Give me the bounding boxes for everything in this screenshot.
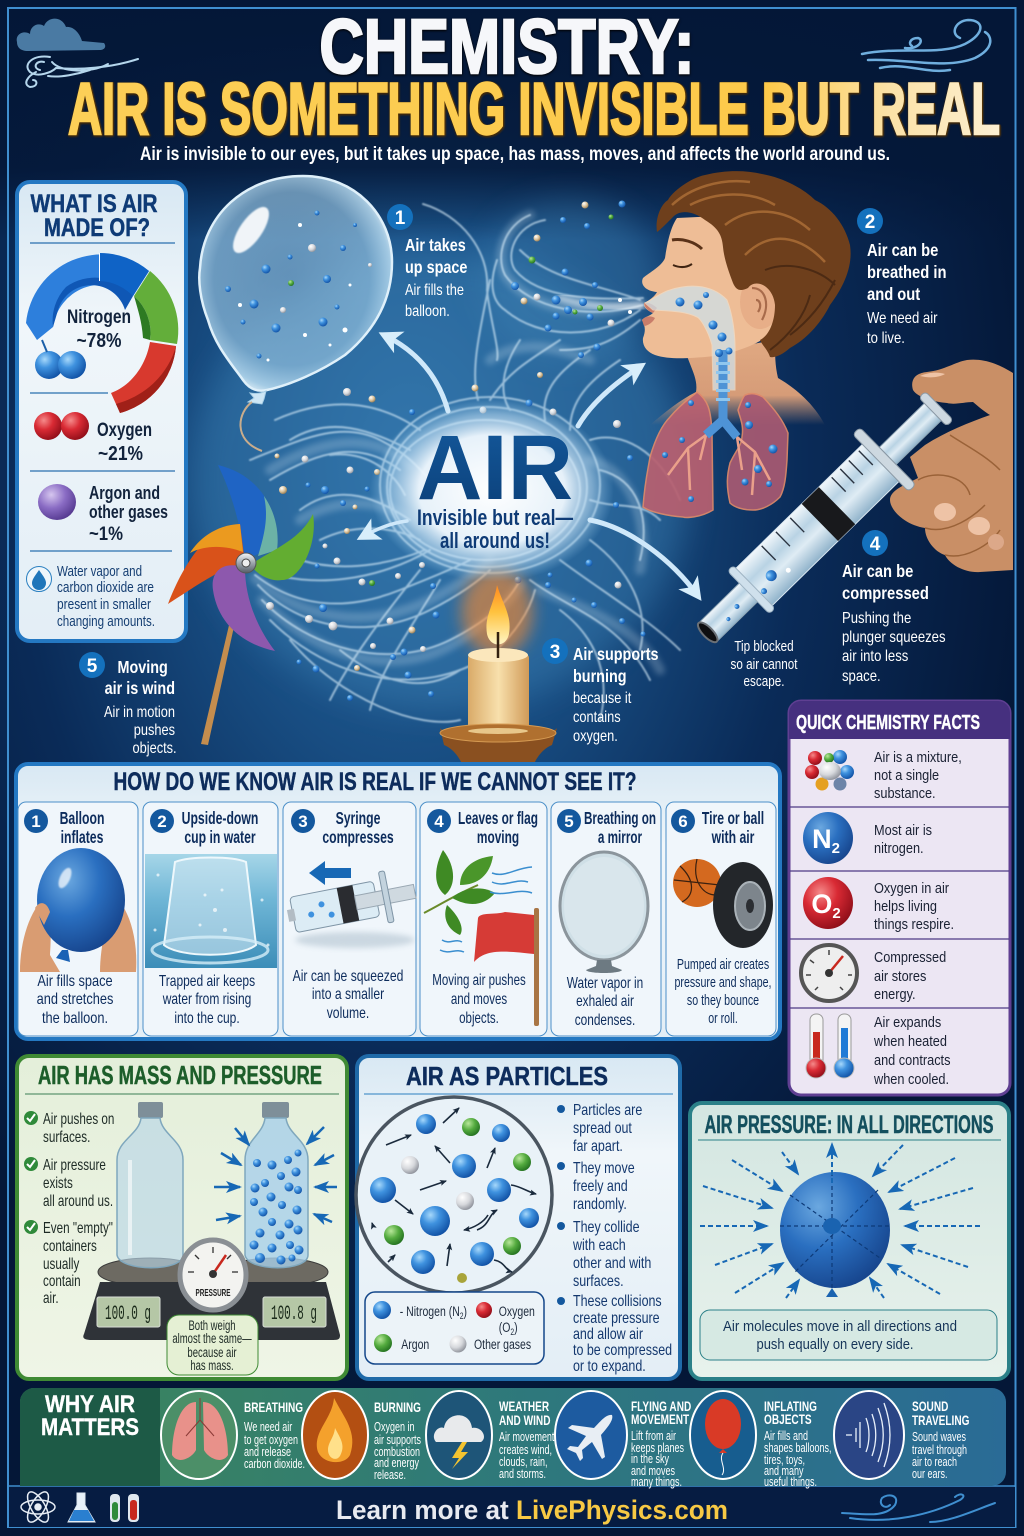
card 4: leaves and flag moving: Moving air pushes <box>432 970 526 988</box>
row text: mixture: not a single <box>874 766 939 783</box>
icon: flask <box>68 1493 95 1522</box>
caption box: Air molecules move in all directions and <box>723 1318 957 1335</box>
panel: air as particles <box>356 1056 680 1379</box>
item: flying and movement: many things. <box>631 1476 682 1489</box>
row text: expands: when heated <box>873 1032 947 1049</box>
item: sound traveling: travel through <box>912 1444 967 1457</box>
row text: oxygen: things respire. <box>874 915 954 932</box>
card 2: upside-down cup: cup in water <box>184 828 256 848</box>
decorative wind swirl bottom right <box>842 1494 995 1522</box>
item: weather and wind <box>426 1391 554 1481</box>
panel: air pressure in all directions <box>690 1103 1009 1379</box>
card 1: balloon inflates: inflates <box>61 828 103 848</box>
item: inflating objects: Air fills and <box>764 1430 808 1443</box>
item: sound traveling <box>834 1391 969 1481</box>
card 6: tire or ball: with air <box>711 828 754 848</box>
item: inflating objects: and many <box>764 1465 804 1478</box>
item: weather and wind: clouds, rain, <box>499 1456 547 1469</box>
checklist: usually <box>43 1254 79 1272</box>
particle legend: 2 <box>510 1327 515 1337</box>
card 5: breathing on a mirror <box>551 802 661 1036</box>
item: flying and movement: keeps planes <box>631 1442 684 1455</box>
water vapor note: present in smaller <box>57 597 151 613</box>
callout 5: moving air is wind: 5 <box>87 656 98 677</box>
callout 4: air can be compressed: 4 <box>870 534 881 555</box>
callout 1: air takes up space <box>387 204 467 320</box>
callout 4: air can be compressed: Pushing the <box>842 610 911 627</box>
caption box <box>700 1310 997 1360</box>
row text: compressed air: air stores <box>874 967 926 984</box>
card 1: balloon inflates: Air fills space <box>37 973 113 990</box>
item: sound traveling: TRAVELING <box>912 1412 969 1428</box>
item: sound traveling: SOUND <box>912 1398 949 1414</box>
item: sound traveling: Sound waves <box>912 1431 966 1444</box>
item: breathing: BREATHING <box>244 1399 303 1415</box>
row text: nitrogen: nitrogen. <box>874 839 924 856</box>
argon row <box>38 483 168 545</box>
pinwheel illustration <box>168 465 314 745</box>
callout 1: air takes up space: Air takes <box>405 236 466 255</box>
item: sound traveling: our ears. <box>912 1468 947 1481</box>
card 4: leaves and flag moving <box>420 802 547 1036</box>
callout 5: moving air is wind: Air in motion <box>104 704 175 721</box>
candle illustration <box>440 567 557 762</box>
item: breathing: and release <box>244 1446 291 1459</box>
item: flying and movement: in the sky <box>631 1453 669 1466</box>
particle bullets: with each <box>572 1237 626 1254</box>
particle legend: 2 <box>460 1311 464 1321</box>
checklist: air. <box>43 1288 59 1306</box>
panel: how do we know air is real <box>16 764 780 1039</box>
checklist: all around us. <box>43 1191 113 1209</box>
item: breathing: carbon dioxide. <box>244 1458 305 1471</box>
callout 2: air can be breathed: and out <box>867 285 921 304</box>
checklist <box>24 1109 114 1306</box>
item: flying and movement: and moves <box>631 1465 675 1478</box>
hand on plunger <box>890 360 1013 572</box>
particle bullets: spread out <box>573 1120 632 1137</box>
particle bullets: to be compressed <box>573 1342 672 1359</box>
oxygen row <box>34 412 152 465</box>
oxygen row: Oxygen <box>97 420 152 441</box>
callout 4: air can be compressed: Air can be <box>842 562 913 581</box>
particle bullets: and allow air <box>573 1326 643 1343</box>
card 6: tire or ball: pressure and shape, <box>674 973 772 990</box>
callout 4: air can be compressed <box>842 530 946 685</box>
card 6: tire or ball <box>666 802 776 1036</box>
particle bullets: These collisions <box>573 1293 662 1310</box>
panel: why air matters <box>20 1388 1006 1489</box>
checklist: containers <box>43 1236 97 1254</box>
callout 3: air supports burning: burning <box>573 667 627 686</box>
card 2: upside-down cup: water from rising <box>162 989 251 1007</box>
panel: what is air made of: MADE OF? <box>44 214 150 242</box>
central AIR label <box>362 335 698 596</box>
note: both weigh the same: because air <box>187 1344 237 1361</box>
card 3: syringe compresses: Air can be squeezed <box>293 967 403 986</box>
particle legend <box>365 1292 544 1364</box>
particle legend: - Nitrogen (N <box>400 1304 460 1319</box>
card 1: balloon inflates: and stretches <box>37 991 113 1008</box>
particle legend: (O <box>499 1320 510 1335</box>
particle bullets: surfaces. <box>573 1273 624 1290</box>
card 3: syringe compresses: 3 <box>298 812 308 831</box>
icon: test tubes <box>110 1494 139 1522</box>
item: inflating objects: INFLATING <box>764 1398 817 1414</box>
callout 4: air can be compressed: space. <box>842 668 881 685</box>
card 4: leaves and flag moving: objects. <box>459 1008 499 1026</box>
title <box>68 4 1000 150</box>
central AIR label: AIR <box>417 417 573 519</box>
item: burning: release. <box>374 1469 406 1482</box>
syringe tip note: Tip blocked <box>734 638 794 654</box>
particle bullets: randomly. <box>573 1196 627 1213</box>
pressure sphere diagram <box>700 1144 980 1298</box>
argon row: Argon and <box>89 483 160 503</box>
callout 1: air takes up space: up space <box>405 258 467 277</box>
callout 3: air supports burning: because it <box>573 690 631 707</box>
callout 1: air takes up space: balloon. <box>405 303 450 320</box>
item: burning <box>302 1391 421 1482</box>
item: breathing: We need air <box>244 1421 293 1434</box>
card 6: tire or ball: Pumped air creates <box>677 955 770 972</box>
card 1: balloon inflates: the balloon. <box>42 1010 108 1027</box>
particle bullets: Particles are <box>573 1102 642 1119</box>
callout 1: air takes up space: Air fills the <box>405 282 464 299</box>
particle circle diagram <box>356 1097 552 1293</box>
particle bullets: They collide <box>573 1219 640 1236</box>
scale base: 100.8 g <box>271 1303 317 1326</box>
callout 4: air can be compressed: air into less <box>842 648 908 665</box>
composition donut chart: ~78% <box>76 330 122 352</box>
icon: atom <box>21 1489 55 1525</box>
air swirl background <box>190 200 690 722</box>
particle bullets: They move <box>573 1160 635 1177</box>
checklist: Air pressure <box>43 1155 106 1173</box>
syringe tip note: escape. <box>744 673 784 689</box>
syringe tip note: so air cannot <box>731 656 798 672</box>
callout 2: air can be breathed: We need air <box>867 310 938 327</box>
icon: N2: N <box>812 824 832 854</box>
card 3: syringe compresses: compresses <box>322 828 394 848</box>
note: both weigh the same: almost the same— <box>172 1330 252 1347</box>
icon: N2 <box>803 812 853 864</box>
item: inflating objects: OBJECTS <box>764 1411 812 1427</box>
callout 1: air takes up space: 1 <box>395 208 406 229</box>
card 4: leaves and flag moving: Leaves or flag <box>458 809 538 829</box>
card 3: syringe compresses: volume. <box>327 1004 369 1023</box>
card 6: tire or ball: Tire or ball <box>702 809 764 829</box>
card 3: syringe compresses: Syringe <box>336 809 381 829</box>
row text: nitrogen: Most air is <box>874 821 932 838</box>
card 5: breathing on a mirror: condenses. <box>575 1010 635 1028</box>
central AIR label: all around us! <box>440 528 550 553</box>
particle bullets: freely and <box>573 1178 628 1195</box>
card 2: upside-down cup <box>143 802 278 1036</box>
card 5: breathing on a mirror: Water vapor in <box>567 973 643 991</box>
checklist: Even "empty" <box>43 1218 113 1236</box>
scale base <box>83 1258 340 1340</box>
callout 2: air can be breathed: breathed in <box>867 263 946 282</box>
panel: why air matters: MATTERS <box>41 1414 139 1441</box>
card 6: tire or ball: 6 <box>678 812 688 831</box>
note: both weigh the same: has mass. <box>190 1357 234 1374</box>
particle legend: ) <box>464 1304 467 1319</box>
item: flying and movement: FLYING AND <box>631 1398 691 1414</box>
callout 5: moving air is wind: pushes <box>134 722 175 739</box>
callout 3: air supports burning: contains <box>573 709 621 726</box>
water vapor note: carbon dioxide are <box>57 580 154 596</box>
callout 3: air supports burning: oxygen. <box>573 728 618 745</box>
particle bullets: or to expand. <box>573 1358 646 1375</box>
panel: what is air made of <box>17 182 186 641</box>
boy breathing illustration <box>642 171 851 517</box>
card 2: upside-down cup: Trapped air keeps <box>159 971 255 989</box>
callout 5: moving air is wind <box>79 652 177 757</box>
card 2: upside-down cup: 2 <box>157 812 167 831</box>
subtitle: Air is invisible to our eyes, but it takes up space, has mass, moves, and affects the world around us. <box>140 144 890 165</box>
row text: oxygen: helps living <box>874 897 937 914</box>
decorative wind swirl top right <box>862 20 990 71</box>
item: breathing <box>161 1391 305 1479</box>
heading: WHAT IS AIR <box>30 190 158 218</box>
heading: HOW DO WE KNOW AIR IS REAL IF WE CANNOT SEE IT? <box>114 768 636 796</box>
particle bullets: create pressure <box>573 1310 660 1327</box>
water vapor note: changing amounts. <box>57 614 155 630</box>
balloon illustration <box>199 176 392 451</box>
card 5: breathing on a mirror: a mirror <box>598 828 642 848</box>
arrows from center <box>362 335 698 596</box>
card 1: balloon inflates: 1 <box>31 812 41 831</box>
call to action: Learn more at LivePhysics.com <box>336 1495 728 1525</box>
callout 3: air supports burning: Air supports <box>573 645 659 664</box>
note: both weigh the same: Both weigh <box>188 1317 236 1334</box>
checklist: contain <box>43 1271 81 1289</box>
item: sound traveling: air to reach <box>912 1456 957 1469</box>
row text: expands: and contracts <box>874 1051 951 1068</box>
checklist: exists <box>43 1173 73 1191</box>
panel: quick chemistry facts <box>789 701 1010 1095</box>
row text: expands <box>873 1013 951 1087</box>
row text: compressed air: energy. <box>874 985 916 1002</box>
callout 5: moving air is wind: objects. <box>133 740 177 757</box>
row text: expands: when cooled. <box>873 1070 949 1087</box>
item: inflating objects <box>690 1391 831 1489</box>
item: burning: combustion <box>374 1446 420 1459</box>
item: weather and wind: WEATHER <box>499 1398 549 1414</box>
card 3: syringe compresses <box>283 802 420 1036</box>
card 1: balloon inflates <box>18 802 138 1036</box>
row text: compressed air <box>874 948 946 1002</box>
callout 5: moving air is wind: air is wind <box>105 679 175 698</box>
item: flying and movement <box>555 1391 691 1489</box>
callout 5: moving air is wind: Moving <box>117 658 168 677</box>
card 6: tire or ball: or roll. <box>708 1009 738 1026</box>
empty bottle <box>117 1102 183 1268</box>
item: weather and wind: Air movement <box>499 1431 554 1444</box>
row text: oxygen: Oxygen in air <box>874 879 949 896</box>
particle legend: Argon <box>401 1337 429 1352</box>
callout 2: air can be breathed: Air can be <box>867 241 938 260</box>
card 3: syringe compresses: into a smaller <box>312 985 384 1004</box>
item: burning: BURNING <box>374 1399 421 1415</box>
item: burning: and energy <box>374 1457 419 1470</box>
particle legend: Other gases <box>474 1337 531 1352</box>
argon row: ~1% <box>89 524 123 545</box>
row text: mixture: Air is a mixture, <box>874 748 962 765</box>
composition donut chart <box>26 253 178 413</box>
row text: expands: Air expands <box>874 1013 941 1030</box>
card 2: upside-down cup: Upside-down <box>182 809 258 829</box>
item: breathing: to get oxygen <box>244 1434 298 1447</box>
item: inflating objects: tires, toys, <box>764 1454 805 1467</box>
water vapor note: Water vapor and <box>57 564 142 580</box>
windpipe and lungs <box>643 286 788 517</box>
particle bullets <box>557 1102 672 1375</box>
bottle with air particles <box>214 1102 337 1268</box>
note: both weigh the same <box>167 1315 258 1375</box>
syringe illustration <box>676 377 967 664</box>
water vapor note <box>26 564 155 630</box>
item: weather and wind: creates wind, <box>499 1444 552 1457</box>
card 5: breathing on a mirror: 5 <box>564 812 574 831</box>
particle bullets: far apart. <box>573 1138 623 1155</box>
syringe tip note <box>731 638 798 689</box>
composition donut chart: Nitrogen <box>67 307 131 328</box>
scale base: 100.0 g <box>105 1303 151 1326</box>
item: inflating objects: useful things. <box>764 1476 817 1489</box>
card 1: balloon inflates: Balloon <box>60 809 104 829</box>
icon: gauge <box>801 945 857 1001</box>
row text: mixture: substance. <box>874 784 936 801</box>
icon: O2 <box>803 877 853 929</box>
row text: mixture <box>874 748 962 801</box>
callout 4: air can be compressed: plunger squeezes <box>842 629 946 646</box>
icon: molecule cluster <box>805 750 854 790</box>
callout 3: air supports burning <box>542 638 659 745</box>
item: flying and movement: Lift from air <box>631 1430 676 1443</box>
icon: thermometers <box>806 1014 854 1078</box>
card 4: leaves and flag moving: and moves <box>451 989 507 1007</box>
footer <box>9 1486 1015 1527</box>
row text: oxygen <box>874 879 954 932</box>
card 5: breathing on a mirror: exhaled air <box>576 991 634 1009</box>
caption box: push equally on every side. <box>756 1336 914 1353</box>
card 5: breathing on a mirror: Breathing on <box>584 809 656 829</box>
checklist: Air pushes on <box>43 1109 114 1127</box>
particle legend: ) <box>514 1320 518 1335</box>
item: weather and wind: AND WIND <box>499 1412 551 1428</box>
panel: air has mass and pressure <box>17 1056 347 1379</box>
card 4: leaves and flag moving: 4 <box>434 812 444 831</box>
item: flying and movement: MOVEMENT <box>631 1411 690 1427</box>
callout 4: air can be compressed: compressed <box>842 584 929 603</box>
central AIR label: Invisible but real— <box>417 505 573 530</box>
item: inflating objects: shapes balloons, <box>764 1442 831 1455</box>
icon: N2: 2 <box>832 840 840 857</box>
heading: AIR HAS MASS AND PRESSURE <box>38 1060 322 1090</box>
floating air particles <box>266 200 646 701</box>
card 6: tire or ball: so they bounce <box>687 991 759 1008</box>
particle bullets: other and with <box>573 1255 651 1272</box>
icon: O2: 2 <box>832 905 841 922</box>
checklist: surfaces. <box>43 1127 90 1145</box>
callout 2: air can be breathed <box>857 208 946 347</box>
argon row: other gases <box>89 502 168 522</box>
decorative cloud and wind top left <box>17 19 138 87</box>
row text: nitrogen <box>874 821 932 856</box>
heading: WHY AIR <box>45 1391 135 1418</box>
item: burning: air supports <box>374 1434 421 1447</box>
title line 1: CHEMISTRY: <box>320 4 694 90</box>
item: weather and wind: and storms. <box>499 1468 546 1481</box>
oxygen row: ~21% <box>98 443 143 465</box>
item: burning: Oxygen in <box>374 1421 414 1434</box>
heading: AIR AS PARTICLES <box>406 1061 608 1091</box>
card 2: upside-down cup: into the cup. <box>174 1008 240 1026</box>
pressure gauge <box>180 1240 246 1310</box>
card 4: leaves and flag moving: moving <box>477 828 519 848</box>
callout 2: air can be breathed: 2 <box>865 212 875 233</box>
callout 2: air can be breathed: to live. <box>867 330 905 347</box>
callout 3: air supports burning: 3 <box>550 642 560 663</box>
icon: O2: O <box>811 889 832 919</box>
pressure gauge: PRESSURE <box>196 1288 231 1299</box>
row text: compressed air: Compressed <box>874 948 946 965</box>
particle legend: Oxygen <box>499 1304 535 1319</box>
